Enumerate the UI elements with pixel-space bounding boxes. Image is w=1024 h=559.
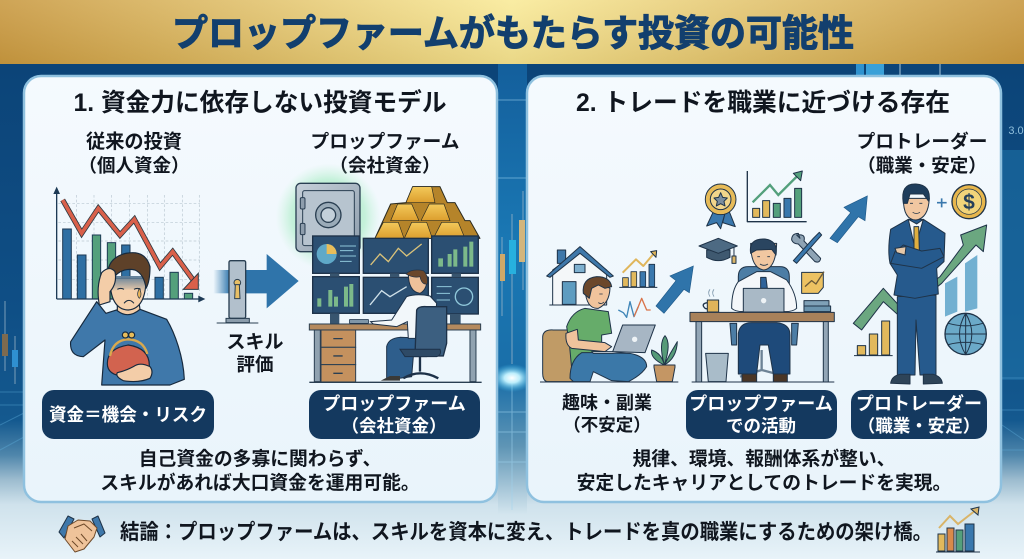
icon: worried person with empty purse [71,253,184,385]
label: activity at prop firm: での活動 [726,416,796,436]
panel background [24,76,497,502]
icon: skill gate with arrow [213,254,299,323]
icon: professional at desk [690,239,834,382]
text: summary of panel 2: 規律、環境、報酬体系が整い、 [633,447,895,469]
label: prop firm company funds: （会社資金） [342,416,446,436]
column subheading: profession and stability: （職業・安定） [857,155,987,176]
arrow: growth step 2 [830,196,867,243]
column heading: conventional investing: 従来の投資 [86,131,182,153]
column heading: prop firm: プロップファーム [311,131,459,152]
axis label: 3.0: 3.0 [1008,125,1024,137]
icon: note with chart [802,272,824,293]
icon: certification medal [705,184,736,229]
text: summary of panel 1: 自己資金の多寡に関わらず、 [139,448,381,469]
label: evaluation: 評価 [236,354,274,375]
icon: pro trader with assets [853,184,987,384]
label: capital equals opportunity and risk: 資金＝機会・リスク [49,405,207,425]
label: hobby and side job: 趣味・副業 [562,393,652,413]
column subheading: personal funds: （個人資金） [78,155,190,176]
label: pro trader stable [851,390,987,439]
arrow: growth step 1 [656,266,693,313]
chart: falling market [53,187,205,302]
icon: graduation cap [699,238,737,263]
panel: investment model [24,76,497,502]
panel: trading as a profession [527,76,1001,502]
label: activity at prop firm [686,390,837,439]
label: prop firm company funds [309,390,480,439]
text: summary of panel 2 [577,447,951,493]
label: pro trader stable: プロトレーダー [856,393,982,414]
label: pro trader stable: （職業・安定） [858,416,980,436]
icon: dollar sign on coin: $ [963,191,975,214]
text: summary of panel 1: スキルがあれば大口資金を運用可能。 [100,471,420,493]
column heading: pro trader: プロトレーダー [857,131,987,152]
conclusion text: 結論：プロップファームは、スキルを資本に変え、トレードを真の職業にするための架け橋。 [120,521,932,544]
text: summary of panel 1 [100,448,420,493]
label: unstable: （不安定） [563,415,651,435]
column subheading: company funds: （会社資金） [329,155,441,176]
panel background [527,76,1001,502]
label: prop firm company funds: プロップファーム [322,394,466,414]
header banner [0,0,1024,64]
icon: safe, gold and trading desk [276,163,482,382]
label: skill: スキル [226,332,284,353]
icon: rising chart [936,507,980,552]
label: activity at prop firm: プロップファーム [689,394,833,414]
icon: wrench and screwdriver [792,232,822,263]
panel heading: 1. 資金力に依存しない投資モデル [74,88,446,117]
icon: handshake [59,516,105,552]
text: summary of panel 2: 安定したキャリアとしてのトレードを実現。 [577,472,951,493]
icon: professional growth chart [747,171,807,222]
icon: hobby trader at home [540,247,678,382]
title: プロップファームがもたらす投資の可能性 [172,13,854,54]
label: capital equals opportunity and risk [42,390,214,439]
panel heading: 2. トレードを職業に近づける存在 [576,89,950,117]
